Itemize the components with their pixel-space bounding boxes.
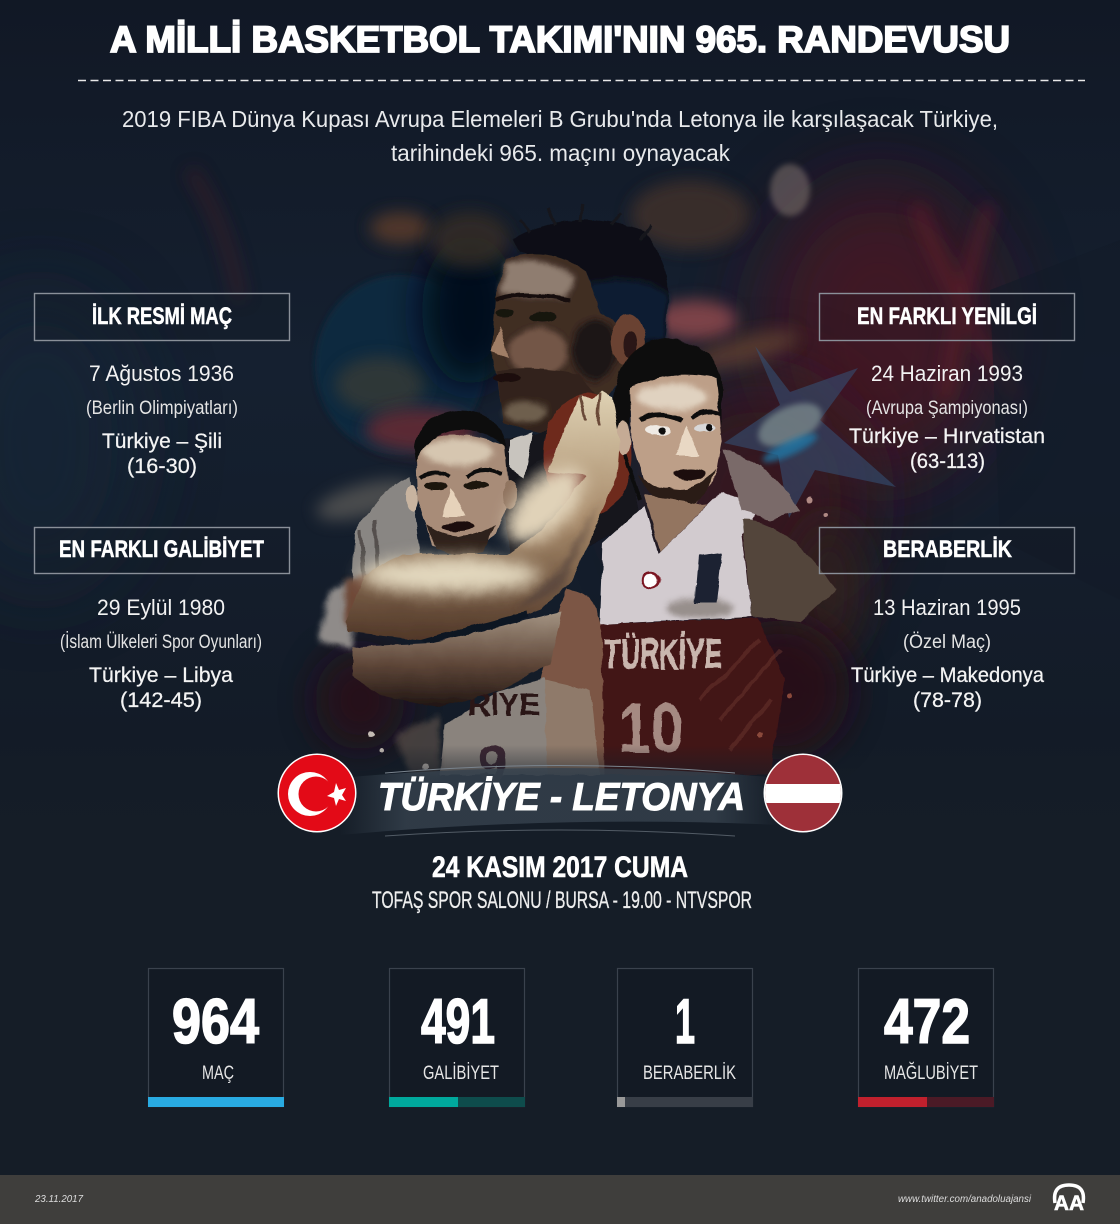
arm: upper <box>346 390 620 643</box>
panel: biggest defeat: (63-113) <box>910 449 985 473</box>
title ribbon <box>0 745 1120 1175</box>
panel: draw <box>820 528 1074 712</box>
lower jersey: RİYE <box>468 686 540 724</box>
lower jersey <box>395 678 548 794</box>
jersey lettering: TÜRKİYE <box>604 630 722 677</box>
stat: draws <box>617 968 753 1107</box>
illustration: players collage <box>318 204 835 794</box>
panel: draw: Türkiye – Makedonya <box>851 663 1044 687</box>
footer: www.twitter.com/anadoluajansi <box>898 1194 1032 1205</box>
panel: first official match: 7 Ağustos 1936 <box>89 361 234 386</box>
panel: first official match <box>34 294 290 478</box>
stat: matches: 964 <box>172 987 259 1057</box>
stat: losses <box>858 968 994 1107</box>
panel: biggest win: EN FARKLI GALİBİYET <box>59 536 264 563</box>
panel: biggest defeat: (Avrupa Şampiyonası) <box>866 398 1028 419</box>
stat: wins: 491 <box>421 987 495 1057</box>
match venue: TOFAŞ SPOR SALONU / BURSA - 19.00 - NTVSPOR <box>372 887 752 914</box>
match date: 24 KASIM 2017 CUMA <box>432 851 688 884</box>
stat: losses: MAĞLUBİYET <box>884 1062 978 1084</box>
player: left head <box>406 410 517 558</box>
player: right head <box>612 338 722 552</box>
panel: biggest defeat: Türkiye – Hırvatistan <box>849 424 1045 448</box>
stat: draws: BERABERLİK <box>643 1063 736 1084</box>
paint smears behind players <box>313 164 896 760</box>
intro text <box>122 106 998 166</box>
player: left body <box>318 476 420 650</box>
jersey number: 10 <box>618 689 684 767</box>
flag: Latvia <box>764 754 842 832</box>
panel: biggest win: (142-45) <box>120 688 202 712</box>
panel: first official match: İLK RESMİ MAÇ <box>92 303 232 330</box>
panel: biggest defeat: EN FARKLI YENİLGİ <box>857 303 1037 330</box>
stat: matches: MAÇ <box>202 1063 234 1084</box>
central skin <box>541 590 604 775</box>
panel: draw: 13 Haziran 1995 <box>873 595 1021 620</box>
paint splatter <box>369 497 827 771</box>
jersey: Türkiye player <box>590 450 835 775</box>
panel: draw: (Özel Maç) <box>903 632 991 653</box>
stat: draws: 1 <box>675 987 695 1057</box>
player: coach head <box>491 204 668 435</box>
panel: first official match: Türkiye – Şili <box>102 429 222 453</box>
panel: biggest defeat <box>820 294 1074 473</box>
dashed divider <box>78 80 1085 82</box>
intro text: 2019 FIBA Dünya Kupası Avrupa Elemeleri B Grubu'nda Letonya ile karşılaşacak Türkiye, <box>122 106 998 132</box>
match heading: TÜRKİYE - LETONYA <box>378 776 745 819</box>
stat: wins: GALİBİYET <box>423 1063 499 1084</box>
stat: losses: 472 <box>884 987 970 1057</box>
ball and torso <box>500 393 640 565</box>
title: A MİLLİ BASKETBOL TAKIMI'NIN 965. RANDEVUSU <box>110 19 1010 60</box>
panel: first official match: (16-30) <box>127 454 197 478</box>
intro text: tarihindeki 965. maçını oynayacak <box>391 140 730 166</box>
icon: AA logo: AA <box>1054 1192 1084 1215</box>
stat: matches <box>148 968 284 1107</box>
panel: biggest win: 29 Eylül 1980 <box>97 595 225 620</box>
flag: Turkey <box>278 754 356 832</box>
panel: draw: BERABERLİK <box>883 536 1013 563</box>
panel: biggest win <box>34 528 290 712</box>
arm: lower <box>352 612 562 708</box>
panel: biggest defeat: 24 Haziran 1993 <box>871 361 1023 386</box>
footer <box>0 1175 1120 1224</box>
footer: 23.11.2017 <box>34 1194 83 1205</box>
panel: biggest win: (İslam Ülkeleri Spor Oyunları) <box>60 632 262 653</box>
stat: wins <box>389 968 525 1107</box>
panel: first official match: (Berlin Olimpiyatları) <box>86 398 238 419</box>
panel: biggest win: Türkiye – Libya <box>89 663 233 687</box>
panel: draw: (78-78) <box>913 688 982 712</box>
lower jersey: 9 <box>478 736 507 794</box>
